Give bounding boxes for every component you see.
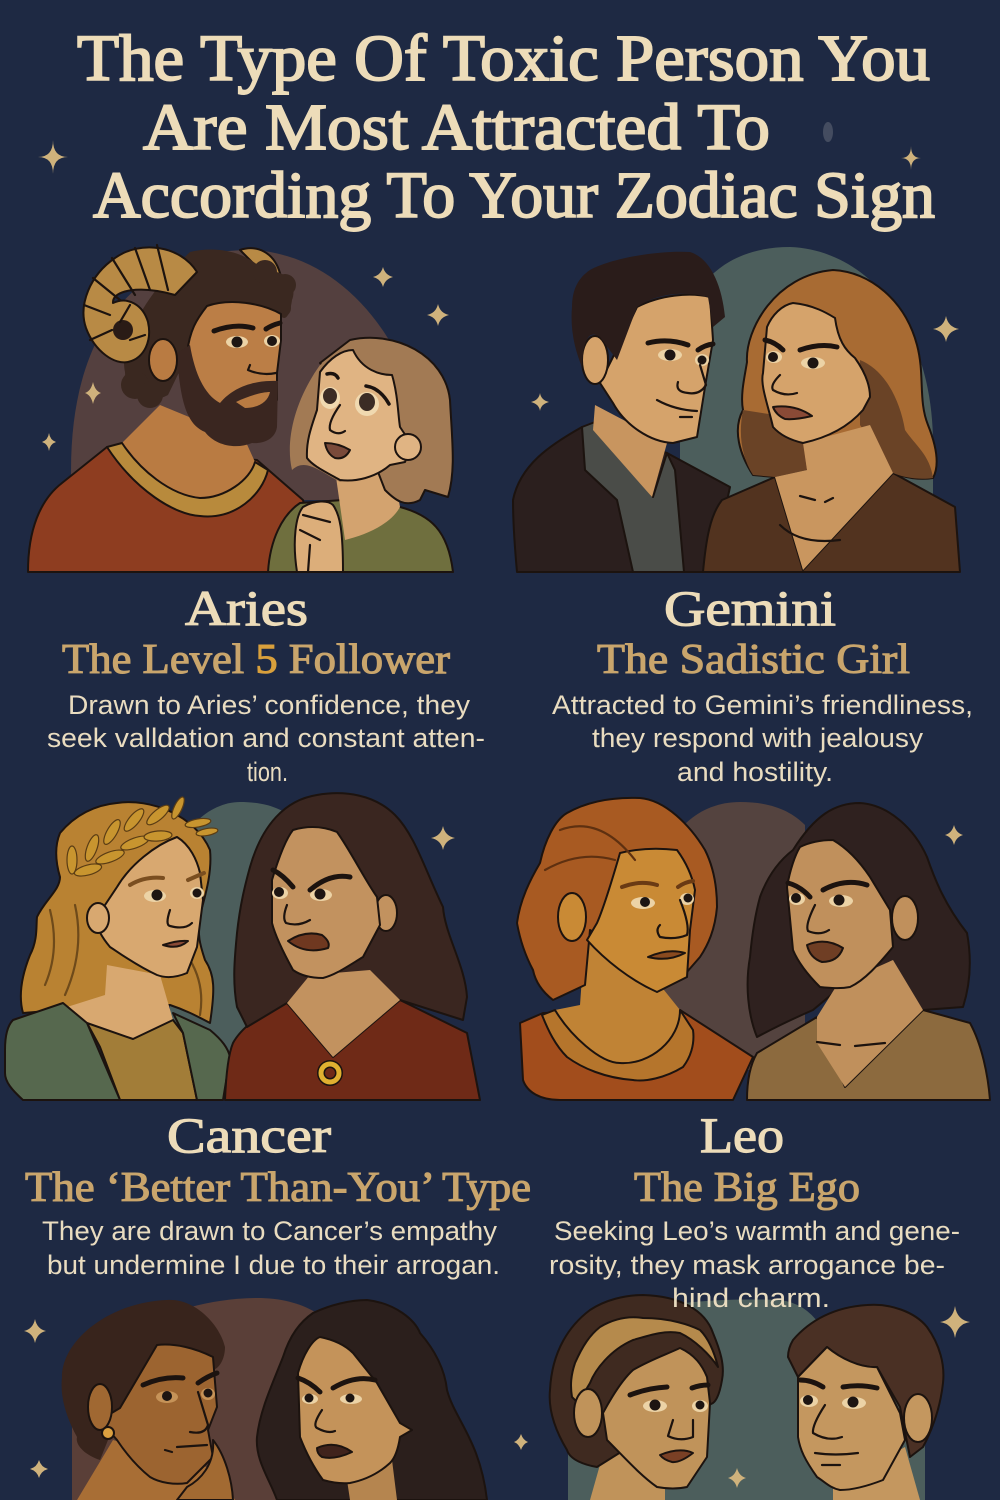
description: Leo: hind charm. xyxy=(672,1283,830,1313)
description: Leo: Seeking Leo’s warmth and gene- xyxy=(554,1216,960,1246)
subtitle: The Level 5 Follower: The Level 5 Follower xyxy=(62,637,450,683)
description: Leo xyxy=(549,1216,960,1313)
panel: bottom right couple xyxy=(550,1295,943,1500)
illustration: Gemini man and sadistic girl xyxy=(513,247,960,572)
illustration: Cancer woman with laurel wreath and better-than-you type xyxy=(5,793,480,1100)
title: Are Most Attracted To xyxy=(143,91,770,164)
illustration: Aries man with ram horns and admiring follower xyxy=(28,245,453,572)
panel: Gemini xyxy=(513,247,973,787)
panel: Leo xyxy=(517,798,990,1313)
subtitle: The Big Ego: The Big Ego xyxy=(634,1165,860,1211)
title xyxy=(77,22,935,232)
sign name: Gemini: Gemini xyxy=(664,580,836,636)
description: Aries: Drawn to Aries’ confidence, they xyxy=(68,690,471,720)
illustration: Leo man and big ego woman xyxy=(517,798,990,1100)
sign name: Leo: Leo xyxy=(700,1107,784,1163)
description: Gemini: Attracted to Gemini’s friendliness, xyxy=(552,690,973,720)
subtitle: The Better Than-You Type: The ‘Better Than-You’ Type xyxy=(25,1165,531,1211)
description: Gemini: and hostility. xyxy=(677,757,833,787)
sign name: Aries: Aries xyxy=(185,580,308,636)
subtitle: The Sadistic Girl: The Sadistic Girl xyxy=(597,637,910,683)
description: Cancer xyxy=(42,1216,500,1280)
title: The Type Of Toxic Person You xyxy=(77,22,930,95)
panel: Aries xyxy=(28,245,485,787)
sign name: Cancer: Cancer xyxy=(167,1107,331,1163)
description: Gemini xyxy=(552,690,973,787)
description: Aries xyxy=(47,690,485,787)
panel: Cancer xyxy=(5,793,531,1280)
description: Aries: seek valldation and constant atten- xyxy=(47,723,485,753)
panel: bottom left couple xyxy=(62,1298,487,1500)
title: According To Your Zodiac Sign xyxy=(93,159,935,232)
description: Leo: rosity, they mask arrogance be- xyxy=(549,1250,945,1280)
description: Gemini: they respond with jealousy xyxy=(592,723,924,753)
description: Aries: tion. xyxy=(247,757,288,787)
description: Cancer: but undermine I due to their arrogan. xyxy=(47,1250,500,1280)
description: Cancer: They are drawn to Cancer’s empathy xyxy=(42,1216,497,1246)
